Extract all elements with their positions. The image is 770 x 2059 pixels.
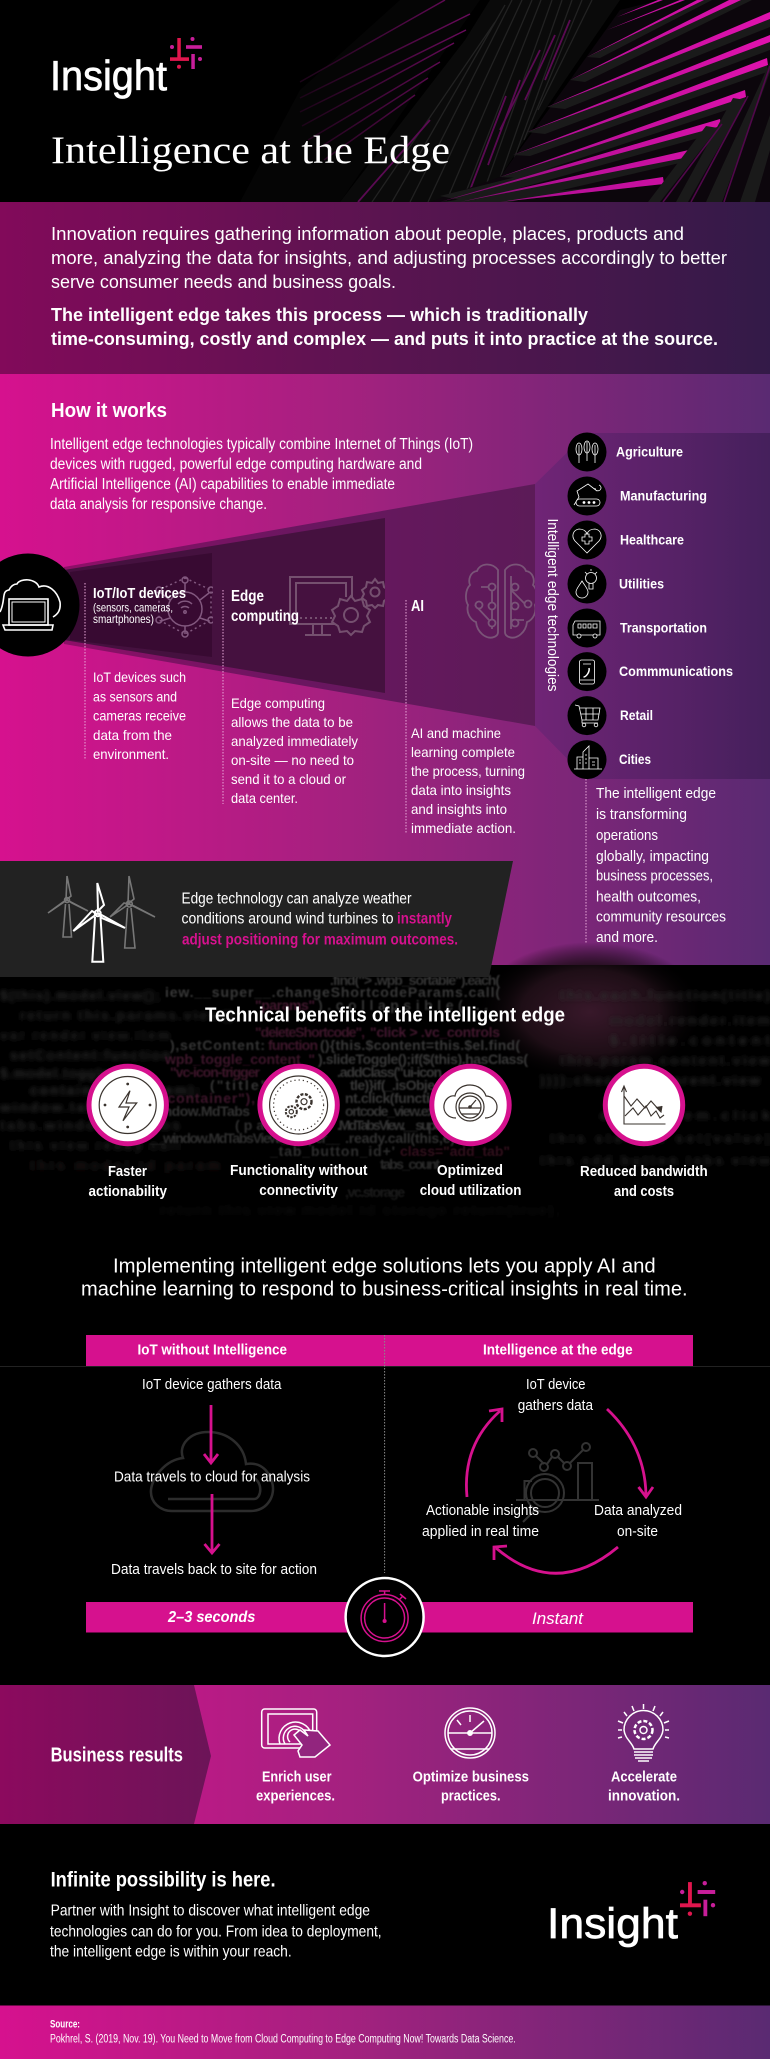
- panel: technical benefits background: "click > .vc_controls: [370, 1024, 500, 1040]
- icon: declining chart: [622, 1086, 666, 1124]
- icon: heart with cross: [573, 529, 601, 553]
- blurred code texture: this.add.button.tabs.view: [540, 1152, 770, 1168]
- blurred code texture: tabs.window.MdTabs: [0, 1117, 180, 1133]
- AI description: data into insights: [411, 782, 511, 798]
- benefit: reduced bandwidth and costs: Reduced bandwidth: [580, 1164, 708, 1180]
- column: IoT devices: (sensors, cameras,: [93, 600, 173, 614]
- edge computing heading: Edge: [231, 588, 264, 605]
- blurred code texture: [0, 987, 770, 1218]
- AI description: and insights into: [411, 801, 507, 817]
- AI description: AI and machine: [411, 725, 501, 741]
- statement: implementing intelligent edge: machine learning to respond to business-critical insights in real time.: [81, 1279, 688, 1301]
- industry: agriculture: [568, 432, 683, 472]
- vertical label: Intelligent edge technologies: [544, 518, 561, 692]
- panel: technical benefits background: .find("> .wpb_sortable").each(: [330, 972, 500, 988]
- column: IoT without intelligence: [111, 1376, 317, 1578]
- panel: technical benefits background: ,vc.storage: [345, 1184, 405, 1200]
- IoT heading: IoT/IoT devices: [93, 585, 186, 602]
- header panel: [0, 0, 770, 202]
- callout text: adjust positioning for maximum outcomes.: [182, 932, 458, 948]
- industry: utilities: Utilities: [619, 577, 664, 592]
- panel: technical benefits background: ortcode_view.ex: [345, 1103, 435, 1119]
- icon: cloud and laptop: [0, 554, 80, 656]
- panel: call to action: [50, 1869, 715, 1961]
- panel: technical benefits background: _tab_button_id+': [269, 1143, 395, 1159]
- intro bold statement: The intelligent edge takes this process — which is traditionally: [51, 305, 588, 325]
- column: intelligent edge summary: health outcomes,: [596, 888, 701, 906]
- blurred code texture: setContent:function: [10, 1047, 170, 1063]
- intro paragraph: more, analyzing the data for insights, and adjusting processes accordingly to better: [51, 248, 727, 268]
- icon: IoT network: [156, 577, 214, 637]
- panel: technical benefits background: "container"),: [160, 1090, 255, 1106]
- panel: technical benefits background: window.MdTabs: [149, 1103, 250, 1119]
- call to action text: the intelligent edge is within your reach.: [50, 1944, 292, 1961]
- blurred code texture: var render.view.item: [0, 1027, 170, 1043]
- column: intelligent edge summary: community resources: [596, 908, 726, 926]
- column: intelligent edge summary: [586, 779, 726, 946]
- edge computing description: send it to a cloud or: [231, 771, 346, 787]
- header bar: IoT without intelligence: IoT without Intelligence: [138, 1342, 287, 1358]
- industry: retail: [568, 696, 653, 735]
- industry: communications: Commmunications: [619, 664, 733, 679]
- edge computing description: analyzed immediately: [231, 733, 358, 749]
- industry: transportation: [568, 608, 707, 648]
- blurred code texture: model.render.item: [610, 1012, 770, 1028]
- panel: technical benefits background: __window.MdTabsView.__super__: [149, 1130, 340, 1146]
- heading: technical benefits: Technical benefits of the intelligent edge: [205, 1005, 565, 1027]
- icon: touch tablet: [262, 1709, 330, 1757]
- icon: shopping cart: [575, 705, 600, 727]
- icon: stopwatch: [346, 1578, 424, 1656]
- result: accelerate innovation: Accelerate: [611, 1769, 677, 1786]
- bottom bar: timing: [86, 1602, 693, 1632]
- call to action text: [50, 1903, 382, 1961]
- panel: technical benefits background: "params": [255, 997, 315, 1013]
- result: enrich user experiences: [256, 1709, 335, 1805]
- heading: infinite possibility: Infinite possibility is here.: [51, 1869, 276, 1892]
- icon: brain: [466, 564, 537, 638]
- IoT description: cameras receive: [93, 708, 186, 724]
- panel: technical benefits background: ).collapsible(...: [318, 997, 488, 1013]
- benefit: optimized cloud utilization: [420, 1066, 521, 1199]
- icon: gauge: [445, 1708, 495, 1758]
- column: intelligence at the edge: on-site: [617, 1523, 658, 1540]
- icon: wind turbines: [48, 876, 155, 962]
- result: accelerate innovation: [608, 1704, 680, 1805]
- panel: technical benefits background: .ready.call(this,e): [345, 1130, 455, 1146]
- source citation: Pokhrel, S. (2019, Nov. 19). You Need to Move from Cloud Computing to Edge Computing Now! Towards Data Science.: [50, 2034, 516, 2046]
- column: intelligence at the edge: IoT device: [526, 1376, 586, 1393]
- source label: Source:: [50, 2019, 80, 2031]
- industry: retail: Retail: [620, 708, 653, 723]
- intro paragraph: serve consumer needs and business goals.: [51, 272, 396, 292]
- blurred code texture: $(this).model.view();: [0, 987, 160, 1003]
- icon: drop and bulb: [576, 569, 597, 598]
- Insight logo footer: [547, 1881, 715, 1948]
- how it works description: Intelligent edge technologies typically combine Internet of Things (IoT): [50, 436, 473, 453]
- benefit: functionality without connectivity: [230, 1066, 368, 1199]
- blurred code texture: $.model.toggleClass: [0, 1065, 150, 1081]
- panel: technical benefits background: .MdTabsView.__supe: [337, 1117, 442, 1133]
- how it works description: data analysis for responsive change.: [50, 496, 267, 513]
- blurred code texture: $.title.content: [610, 1032, 770, 1048]
- IoT description: environment.: [93, 746, 169, 762]
- column: IoT without intelligence: Data travels back to site for action: [111, 1561, 317, 1578]
- IoT description: as sensors and: [93, 688, 177, 704]
- blurred code texture: return this.params.view();: [20, 1007, 240, 1023]
- AI description: learning complete: [411, 744, 515, 760]
- blurred code texture: this.each.function(title): [560, 987, 770, 1003]
- panel: technical benefits background: ),setContent:: [170, 1037, 265, 1053]
- how it works description: devices with rugged, powerful edge computing hardware and: [50, 456, 422, 473]
- panel: technical benefits background: class="add_tab": [400, 1143, 510, 1159]
- column: intelligent edge summary: and more.: [596, 929, 658, 946]
- intro paragraph: Innovation requires gathering information about people, places, products and: [51, 224, 684, 244]
- industry: healthcare: Healthcare: [620, 533, 684, 548]
- column: intelligence at the edge: Actionable insights: [426, 1502, 539, 1519]
- panel: technical benefits background: function: [268, 1037, 318, 1053]
- column: intelligent edge summary: globally, impacting: [596, 848, 709, 865]
- result: accelerate innovation: innovation.: [608, 1788, 680, 1805]
- panel: comparison: [0, 1335, 770, 1656]
- intro band: [0, 202, 770, 374]
- call to action text: technologies can do for you. From idea to deployment,: [50, 1924, 382, 1941]
- column: intelligence at the edge: [422, 1376, 682, 1573]
- panel: technical benefits background: (){this.$content=this.$el.find(: [320, 1037, 520, 1053]
- statement: implementing intelligent edge: [81, 1256, 688, 1301]
- header bar: intelligence at the edge: Intelligence at the edge: [483, 1342, 633, 1358]
- Insight logo: [50, 37, 202, 99]
- column: IoT without intelligence: Data travels to cloud for analysis: [114, 1469, 310, 1486]
- bottom bar: timing: Instant: [532, 1609, 584, 1628]
- industry: cities: [568, 740, 651, 779]
- AI description: [411, 725, 525, 836]
- panel: technical benefits background: tle)}if(_.isObje: [350, 1077, 435, 1093]
- heading: business results: Business results: [51, 1745, 183, 1767]
- column: intelligent edge summary: The intelligent edge: [596, 785, 716, 802]
- industry: utilities: [568, 564, 664, 604]
- result: optimize business practices: practices.: [441, 1788, 500, 1805]
- column: intelligent edge summary: is transforming: [596, 806, 687, 823]
- intro bold statement: [51, 305, 718, 349]
- benefit: faster actionability: actionability: [88, 1184, 167, 1200]
- icon: lightning: [99, 1076, 156, 1134]
- benefit: optimized cloud utilization: cloud utilization: [420, 1183, 521, 1199]
- panel: technical benefits background: wpb_toggle_content_": [164, 1051, 315, 1067]
- result: enrich user experiences: experiences.: [256, 1788, 335, 1805]
- edge computing description: [231, 695, 358, 806]
- industry: agriculture: Agriculture: [616, 444, 683, 460]
- benefit: reduced bandwidth and costs: and costs: [614, 1184, 674, 1200]
- result: enrich user experiences: Enrich user: [262, 1769, 332, 1786]
- AI heading: AI: [411, 598, 424, 615]
- funnel graphic: [64, 484, 535, 726]
- call to action text: Partner with Insight to discover what intelligent edge: [51, 1903, 370, 1920]
- benefit: reduced bandwidth and costs: [580, 1066, 708, 1200]
- panel: technical benefits background: ).slideToggle();if($(this).hasClass(: [318, 1051, 528, 1067]
- source band: [0, 2006, 770, 2059]
- blurred code texture: container.find(item);: [30, 1082, 200, 1098]
- column: intelligence at the edge: applied in real time: [422, 1523, 539, 1540]
- arrow: cloud to site: [204, 1494, 220, 1553]
- column: AI: [406, 564, 537, 836]
- panel: business results: [0, 1685, 770, 1824]
- Insight logo: Insight: [50, 52, 167, 99]
- icon: robot arm: [574, 484, 601, 506]
- panel: technical benefits background: [0, 942, 770, 1295]
- result: optimize business practices: [413, 1708, 529, 1805]
- edge computing description: Edge computing: [231, 695, 325, 711]
- header abstract ribbon artwork: [300, 0, 770, 202]
- benefit: functionality without connectivity: Functionality without: [230, 1163, 368, 1179]
- icon: light bulb with gear: [618, 1704, 669, 1761]
- column: IoT without intelligence: IoT device gathers data: [142, 1376, 282, 1393]
- callout text: conditions around wind turbines to: [182, 910, 394, 928]
- column: intelligence at the edge: gathers data: [518, 1397, 594, 1414]
- title: Intelligence at the Edge: [51, 129, 450, 172]
- arrow label panel: [0, 1685, 211, 1824]
- Insight logo footer: Insight: [547, 1900, 678, 1948]
- AI description: immediate action.: [411, 820, 516, 836]
- icon: wheat: [576, 441, 598, 463]
- column: edge computing: [223, 577, 388, 806]
- industry: communications: [568, 652, 733, 691]
- callout text: Edge technology can analyze weather: [182, 890, 412, 908]
- edge computing heading: [231, 588, 299, 625]
- callout text: instantly: [397, 910, 452, 928]
- panel: intelligent edge technologies: [535, 432, 770, 779]
- header bar: IoT without intelligence: [86, 1335, 693, 1366]
- benefit: faster actionability: Faster: [108, 1164, 147, 1180]
- callout text: [182, 890, 458, 948]
- how it works description: [50, 436, 473, 513]
- intro paragraph: [51, 224, 727, 292]
- industry: healthcare: [568, 520, 684, 560]
- panel: technical benefits background: "vc-icon-trigger: [170, 1064, 261, 1080]
- blurred code texture: return this.view.model.id.storage.return(true);: [160, 1202, 560, 1218]
- panel: how it works: [0, 374, 770, 965]
- heading: how it works: How it works: [51, 400, 167, 422]
- panel: technical benefits background: ("title"),: [210, 1077, 280, 1093]
- edge computing description: allows the data to be: [231, 714, 353, 730]
- result: optimize business practices: Optimize business: [413, 1769, 529, 1786]
- icon: city buildings: [574, 746, 602, 769]
- AI description: the process, turning: [411, 763, 525, 779]
- industry: transportation: Transportation: [620, 621, 707, 636]
- column: IoT devices: [85, 577, 214, 762]
- arrow: device to cloud: [204, 1405, 218, 1463]
- column: intelligent edge summary: operations: [596, 827, 658, 844]
- blurred code texture: this.view.ready.call: [10, 1137, 180, 1153]
- blurred code texture: ))));checkbox.parent.view: [540, 1072, 760, 1088]
- benefit: faster actionability: [88, 1066, 167, 1200]
- logo symbol footer: [680, 1881, 715, 1916]
- bottom bar: timing: 2–3 seconds: [167, 1609, 255, 1626]
- blurred code texture: window.tabs.view: [0, 1099, 150, 1115]
- column: IoT devices: smartphones): [93, 612, 154, 626]
- intro bold statement: time-consuming, costly and complex — and puts it into practice at the source.: [51, 329, 718, 349]
- industry: cities: Cities: [619, 752, 651, 767]
- edge computing heading: computing: [231, 608, 299, 625]
- column: intelligence at the edge: Data analyzed: [594, 1502, 682, 1519]
- logo symbol: [170, 37, 202, 69]
- icon: smartphone: [580, 660, 594, 684]
- blurred code texture: this.storage.set(value): [550, 1130, 770, 1146]
- panel: technical benefits background: iew.__super__.changeShortcodeParams.call(: [165, 984, 500, 1000]
- blurred code texture: this.model.id.param: [30, 1157, 220, 1173]
- benefit: optimized cloud utilization: Optimized: [437, 1163, 503, 1179]
- IoT description: data from the: [93, 727, 172, 743]
- icon: monitor and gears: [290, 577, 388, 635]
- icon: ghost analytics: [516, 1443, 599, 1522]
- blurred code texture: event.item.click: [600, 1107, 770, 1123]
- edge computing description: on-site — no need to: [231, 752, 354, 768]
- IoT description: [93, 669, 186, 762]
- statement: implementing intelligent edge: Implementing intelligent edge solutions lets you apply AI and: [113, 1256, 656, 1278]
- industry: manufacturing: Manufacturing: [620, 488, 707, 504]
- panel: technical benefits background: tabs_count: [380, 1156, 440, 1172]
- how it works description: Artificial Intelligence (AI) capabilities to enable immediate: [50, 476, 395, 493]
- section: technical benefits content: [81, 1005, 708, 1301]
- edge computing description: data center.: [231, 790, 298, 806]
- icon: bus: [573, 621, 600, 638]
- icon: cloud gauge: [444, 1085, 497, 1121]
- industry: manufacturing: [568, 476, 707, 516]
- panel: technical benefits background: (parent,: [235, 1117, 315, 1133]
- icon: gears: [270, 1076, 328, 1134]
- callout: wind turbines: [0, 861, 513, 977]
- column: intelligent edge summary: business processes,: [596, 868, 713, 884]
- panel: technical benefits background: "deleteShortcode",: [255, 1024, 365, 1040]
- panel: technical benefits background: .addClass("ui-icon: [337, 1064, 442, 1080]
- panel: technical benefits background: nt.click(functi: [345, 1090, 430, 1106]
- icon: ghost cloud: [151, 1432, 273, 1511]
- blurred code texture: this.param.content.view: [560, 1052, 770, 1068]
- benefit: functionality without connectivity: connectivity: [259, 1183, 338, 1199]
- arrows: data cycle: [466, 1409, 653, 1573]
- IoT description: IoT devices such: [93, 669, 186, 685]
